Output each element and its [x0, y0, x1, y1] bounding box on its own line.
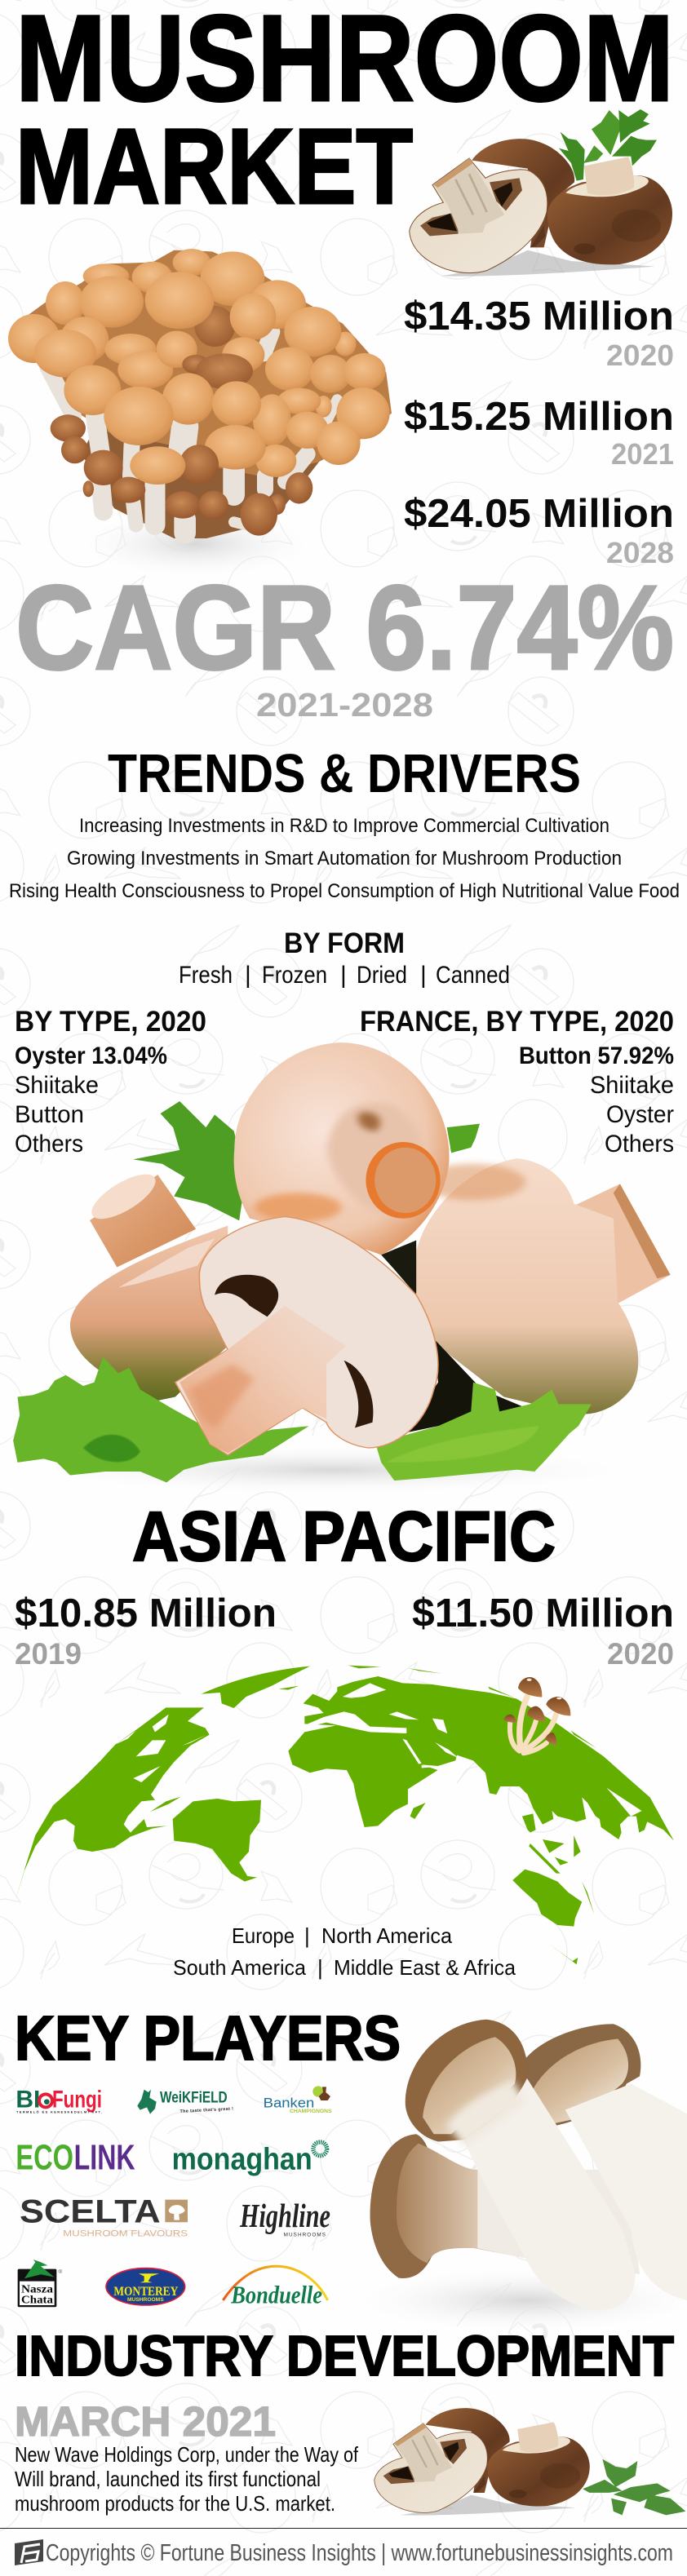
- seas and lakes: [116, 1683, 642, 1817]
- logo: Banken: Banken: [264, 2095, 314, 2110]
- logo: Nasza Chata: ®: [58, 2268, 62, 2275]
- left mushroom stem: [447, 2076, 636, 2310]
- company logos: [16, 2086, 332, 2308]
- value 2028: $24.05 Million: [404, 492, 674, 536]
- logo: Ecolink: LINK: [74, 2137, 135, 2177]
- logo: BioFungi: [16, 2086, 102, 2114]
- photo: white button mushrooms on lettuce: [13, 1042, 671, 1495]
- Asia Pacific values: [15, 1591, 674, 1671]
- regions line 1: [232, 1923, 453, 1948]
- year 2019: 2019: [15, 1637, 82, 1671]
- logo: Ecolink: [16, 2137, 135, 2177]
- CAGR period: 2021-2028: [256, 686, 433, 724]
- line 3: mushroom products for the U.S. market.: [15, 2491, 335, 2516]
- development description: [15, 2442, 359, 2516]
- logo: Nasza Chata: Chata: [21, 2293, 53, 2305]
- back leaf right: [447, 1124, 480, 1153]
- logo: Highline: Highline: [239, 2198, 330, 2235]
- right mushroom cap: [414, 1158, 638, 1414]
- trend 1: Increasing Investments in R&D to Improve Commercial Cultivation: [79, 815, 609, 837]
- value 2021: $15.25 Million: [404, 395, 674, 439]
- year 2020: 2020: [607, 1637, 674, 1671]
- title line: market: MARKET: [16, 106, 413, 226]
- value 2020: $11.50 Million: [412, 1591, 674, 1635]
- back leaf left: [133, 1101, 246, 1220]
- heading: FRANCE, BY TYPE, 2020: [360, 1006, 674, 1038]
- world map: [15, 1666, 674, 1964]
- shiitake: Shiitake: [590, 1072, 674, 1099]
- right mushroom: [517, 2024, 640, 2128]
- logo: Scelta: SCELTA: [20, 2193, 161, 2229]
- Asia Pacific heading: ASIA PACIFIC: [132, 1498, 556, 1576]
- button: Button: [15, 1101, 84, 1128]
- logo: BioFungi: TERMELŐ ÉS KERESKEDELMI KFT.: [16, 2110, 102, 2114]
- logo: Scelta: MUSHROOM FLAVOURS: [63, 2229, 188, 2239]
- photo: brown mushrooms with parsley: [410, 109, 672, 277]
- value 2019: $10.85 Million: [15, 1591, 277, 1635]
- by form section: [179, 927, 510, 989]
- regions line 1: North America: [321, 1923, 453, 1948]
- logo: Banken: CHAMPIGNONS: [290, 2109, 332, 2114]
- form list: |: [245, 962, 251, 989]
- trend 2: Growing Investments in Smart Automation for Mushroom Production: [67, 848, 622, 870]
- parsley sprig: [583, 2459, 685, 2515]
- regions line 1: |: [304, 1923, 310, 1948]
- logo: BioFungi: Fungi: [52, 2086, 102, 2113]
- form list: Dried: [357, 962, 407, 989]
- lower mushroom cap: [370, 2134, 436, 2278]
- logo: Banken: [264, 2086, 332, 2114]
- footer: [15, 2539, 673, 2566]
- logo: Scelta: [20, 2193, 188, 2239]
- logo: Nasza Chata: [18, 2260, 62, 2307]
- year 2028: 2028: [606, 536, 674, 569]
- logo: Weikfield: The taste that's great !: [180, 2107, 233, 2114]
- oyster share: Oyster 13.04%: [15, 1042, 167, 1069]
- photo: brown mushrooms bottom: [375, 2408, 685, 2516]
- icon: Fortune Business Insights logo: [15, 2539, 43, 2565]
- logo: BioFungi: BI: [16, 2086, 40, 2113]
- logo: Highline: MUSHROOMS: [284, 2233, 326, 2238]
- lower mushroom stem: [477, 2170, 640, 2274]
- photo: shimeji mushroom cluster: [8, 249, 392, 579]
- by form heading: BY FORM: [284, 927, 405, 959]
- button share: Button 57.92%: [519, 1042, 674, 1069]
- trends and drivers heading: TRENDS & DRIVERS: [108, 743, 581, 804]
- mushroom pair: [375, 2408, 590, 2516]
- regions line 2: South America: [173, 1955, 307, 1980]
- form list: |: [340, 962, 347, 989]
- regions line 1: Europe: [232, 1923, 295, 1948]
- year 2021: 2021: [611, 437, 674, 471]
- footer rule: [0, 2528, 687, 2529]
- line 1: New Wave Holdings Corp, under the Way of: [15, 2442, 359, 2467]
- right lettuce: [377, 1383, 592, 1481]
- left mushroom cap: [406, 2020, 528, 2141]
- photo: king oyster mushrooms: [342, 2020, 687, 2334]
- oyster: Oyster: [606, 1101, 674, 1128]
- form list: |: [420, 962, 427, 989]
- right mushroom stem: [574, 1184, 671, 1306]
- left mushroom cap: [70, 1226, 228, 1401]
- logo: Monterey: MUSHROOMS: [127, 2298, 164, 2303]
- form list: Canned: [436, 962, 510, 989]
- regions list: [173, 1923, 516, 1980]
- continents: [15, 1666, 674, 1964]
- form list: Fresh: [179, 962, 233, 989]
- title: [16, 0, 674, 226]
- left lettuce: [13, 1357, 309, 1482]
- logo: Monaghan: monaghan: [172, 2142, 312, 2176]
- market value figures: [404, 294, 674, 569]
- type breakdown: global: [15, 1006, 206, 1157]
- logo: Nasza Chata: Nasza: [21, 2283, 53, 2295]
- cut mushroom slice: [175, 1217, 438, 1455]
- shiitake: Shiitake: [15, 1072, 99, 1099]
- logo: Highline: [239, 2198, 330, 2238]
- parsley: [559, 109, 657, 181]
- logo: Weikfield: [137, 2089, 233, 2114]
- logo: Bonduelle: Bonduelle: [230, 2281, 322, 2308]
- key players heading: KEY PLAYERS: [15, 2003, 401, 2074]
- left mushroom stem: [90, 1175, 196, 1268]
- logo: Ecolink: ECO: [16, 2137, 73, 2177]
- regions line 2: Middle East & Africa: [334, 1955, 516, 1980]
- logo: Weikfield: WeiKFiELD: [160, 2089, 228, 2106]
- line 2: Will brand, launched its first functional: [15, 2467, 321, 2491]
- development date: MARCH 2021: [15, 2398, 276, 2445]
- type breakdown: France: [360, 1006, 674, 1157]
- logo: Bonduelle: [223, 2266, 328, 2308]
- icon: mushrooms on map: [503, 1677, 570, 1753]
- others: Others: [605, 1131, 674, 1157]
- heading: BY TYPE, 2020: [15, 1006, 206, 1038]
- regions line 2: [173, 1955, 516, 1980]
- form list: Frozen: [262, 962, 327, 989]
- form list: [179, 962, 510, 989]
- logo: Monterey: [106, 2268, 185, 2305]
- others: Others: [15, 1131, 83, 1157]
- value 2020: $14.35 Million: [404, 294, 674, 339]
- trends list: [9, 815, 680, 902]
- regions line 2: |: [317, 1955, 323, 1980]
- top mushroom: [234, 1042, 450, 1255]
- year 2020: 2020: [606, 339, 674, 372]
- logo: Monterey: MONTEREY: [113, 2285, 178, 2299]
